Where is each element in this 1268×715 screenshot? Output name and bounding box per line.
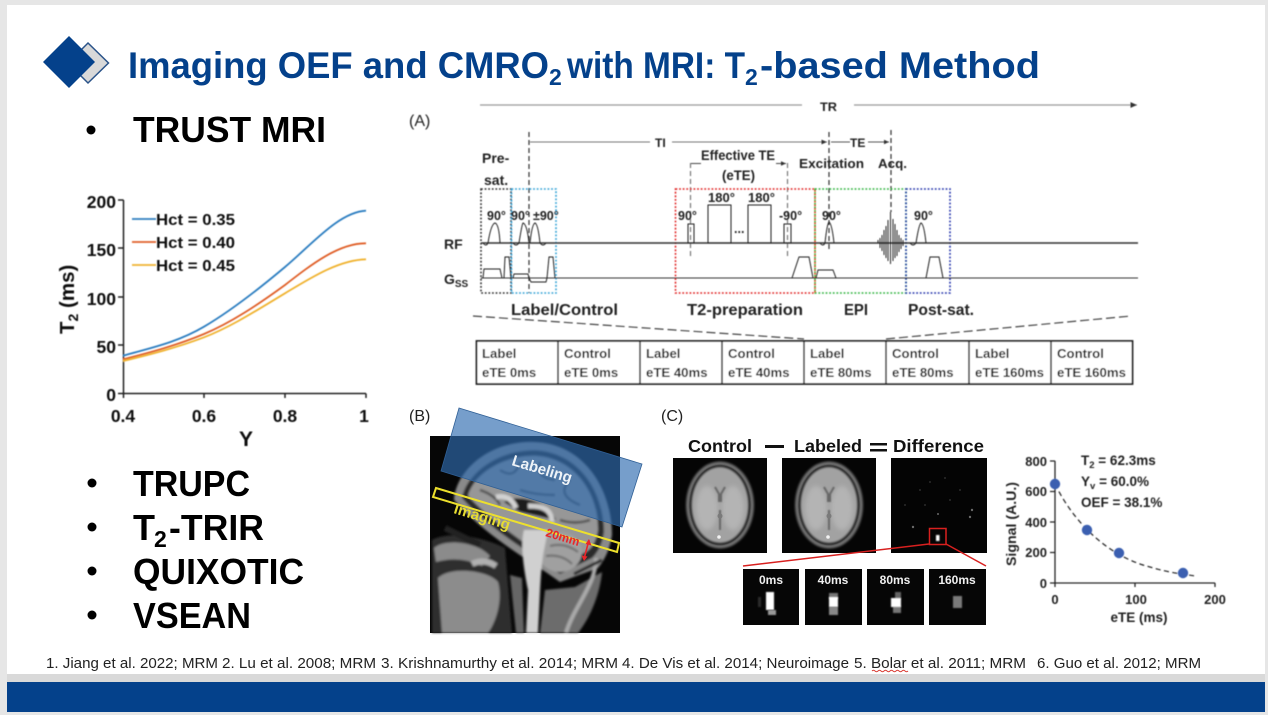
zoomed tile: 0ms: 0ms [759, 573, 783, 587]
zoom dashed lines [473, 316, 1131, 339]
acquisition label: Acq. [878, 156, 907, 171]
scatter x title: eTE (ms) [1110, 610, 1168, 625]
gradient pulses [483, 257, 943, 282]
section labels: EPI [844, 302, 868, 319]
acquisition table: eTE 0ms [482, 365, 536, 380]
pre-sat label: sat. [484, 172, 508, 188]
flip angle labels: 90° [487, 209, 506, 223]
curve: Hct 0.40 [123, 243, 366, 359]
title: 2 [745, 64, 758, 90]
acquisition table [476, 341, 1132, 384]
acquisition table: Control [564, 346, 611, 361]
bullet: TRUST MRI: TRUST MRI [133, 109, 326, 150]
x axis tick labels: 0.6 [192, 406, 216, 426]
flip angle labels: 180° [748, 190, 775, 205]
flip angle labels: ±90° [533, 209, 559, 223]
x axis tick labels: 1 [359, 406, 369, 426]
difference image [891, 458, 987, 553]
scatter y tick labels: 800 [1025, 454, 1047, 469]
flip angle labels: -90° [779, 209, 802, 223]
x axis tick labels [111, 406, 369, 426]
zoomed tile: 40ms: 40ms [818, 573, 849, 587]
scatter y tick labels: 600 [1025, 484, 1047, 499]
bullet list: other methods: -TRIR [169, 507, 264, 548]
curve: Hct 0.35 [123, 211, 366, 356]
line chart: T2 vs Y [56, 192, 369, 451]
acquisition table: Control [728, 346, 775, 361]
imaging text: Imaging [452, 501, 512, 534]
icon: title diamonds [43, 36, 108, 88]
references: 2. Lu et al. 2008; MRM [222, 656, 376, 672]
TE arrow [831, 136, 889, 150]
fit results: T [1081, 453, 1089, 468]
panel C: control, labeled and difference images [661, 408, 987, 625]
panel B: sagittal MRI with labeling and imaging slabs [409, 408, 642, 633]
zoomed tile: 80ms: 80ms [880, 573, 911, 587]
fit curve [1055, 484, 1195, 576]
acquisition table: eTE 0ms [564, 365, 618, 380]
y axis tick labels: 50 [97, 337, 116, 357]
labeling slab [441, 408, 642, 527]
y axis tick labels: 100 [87, 289, 116, 309]
control image [673, 458, 767, 553]
zoomed tile: 160ms [929, 569, 986, 625]
acquisition table: Label [482, 346, 516, 361]
references [46, 656, 1201, 672]
references: 1. Jiang et al. 2022; MRM [46, 656, 218, 672]
Gss label: G [444, 271, 455, 287]
fit results: 2 [1089, 460, 1095, 471]
scatter y tick labels: 0 [1040, 576, 1047, 591]
zoomed tile: 160ms: 160ms [938, 573, 976, 587]
scatter chart: signal vs eTE [1004, 453, 1226, 625]
bullet list: other methods: TRUPC [133, 463, 250, 504]
RF and Gss baselines [481, 243, 1138, 278]
acquisition table: eTE 80ms [892, 365, 954, 380]
pre-sat label [482, 150, 510, 188]
bullet list: other methods: VSEAN [133, 595, 251, 636]
red zoom callout [743, 528, 986, 566]
zoomed tile: 0ms [743, 569, 799, 625]
acquisition table: eTE 40ms [646, 365, 708, 380]
y axis title: T [56, 321, 79, 334]
chart legend: Hct = 0.45 [156, 258, 235, 275]
fit results: = 62.3ms [1095, 453, 1156, 468]
fit results: Y [1081, 474, 1090, 489]
zoomed tile: 80ms [867, 569, 924, 625]
footer band [7, 682, 1265, 712]
title: with MRI: T [566, 45, 745, 86]
chart legend [132, 212, 235, 275]
references: 3. Krishnamurthy et al. 2014; MRM [381, 656, 618, 672]
chart legend: Hct = 0.40 [156, 235, 235, 252]
timing dashed lines [529, 130, 891, 293]
image equation heading: Difference [893, 436, 984, 456]
x axis tick labels: 0.8 [273, 406, 297, 426]
flip angle labels: 90° [822, 209, 841, 223]
y axis tick labels: 0 [106, 385, 116, 405]
fit results: = 60.0% [1095, 474, 1149, 489]
acquisition table: Label [975, 346, 1009, 361]
flip angle labels: 180° [708, 190, 735, 205]
title: Imaging OEF and CMRO [128, 45, 549, 86]
TR arrow: TR [820, 100, 837, 114]
imaging slab [433, 488, 619, 552]
scatter y tick labels: 200 [1025, 545, 1047, 560]
acquisition table: eTE 160ms [975, 365, 1044, 380]
TI arrow: TI [655, 136, 666, 150]
fit results: OEF = 38.1% [1081, 495, 1162, 510]
scatter x tick labels [1051, 592, 1226, 607]
acquisition table: Control [892, 346, 939, 361]
bullet list: other methods: QUIXOTIC [133, 551, 304, 592]
acquisition table: eTE 40ms [728, 365, 790, 380]
data points [1050, 479, 1188, 578]
y axis title: (ms) [56, 265, 79, 314]
image equation heading [688, 436, 984, 456]
labeled image [782, 458, 876, 553]
bullet list: other methods: T [133, 507, 155, 548]
panel label B: (B) [409, 408, 430, 425]
acquisition table: eTE 160ms [1057, 365, 1126, 380]
y axis tick labels [87, 192, 116, 405]
flip angle labels: ... [734, 222, 744, 236]
TE arrow: TE [850, 136, 865, 150]
sequence section boxes [481, 189, 950, 293]
sagittal brain image [430, 436, 620, 633]
labeling text: Labeling [510, 453, 574, 487]
acquisition table: Control [1057, 346, 1104, 361]
x axis title: Y [239, 428, 253, 451]
section labels: T2-preparation [687, 302, 803, 319]
effective TE label [691, 148, 786, 183]
image equation heading: Control [688, 436, 752, 456]
Gss label: SS [455, 279, 469, 290]
excitation label: Excitation [799, 156, 864, 171]
EPI readout [878, 212, 903, 264]
section labels: Post-sat. [908, 302, 974, 319]
flip angle labels [487, 190, 933, 236]
flip angle labels: 90° [914, 209, 933, 223]
y axis tick labels: 200 [87, 192, 116, 212]
panel label A: (A) [409, 113, 430, 130]
RF label: RF [444, 236, 463, 252]
pre-sat label: Pre- [482, 150, 510, 166]
scatter y title: Signal (A.U.) [1004, 482, 1019, 566]
title [128, 45, 1040, 90]
title: -based Method [760, 45, 1040, 86]
effective TE label: Effective TE [701, 148, 775, 163]
bullet list: other methods [88, 463, 304, 636]
references: 4. De Vis et al. 2014; Neuroimage [622, 656, 849, 672]
x axis tick labels: 0.4 [111, 406, 135, 426]
acquisition table: Label [810, 346, 844, 361]
image equation heading: Labeled [794, 436, 862, 456]
panel label C: (C) [661, 408, 683, 425]
flip angle labels: 90° [678, 209, 697, 223]
flip angle labels: 90° [511, 209, 530, 223]
scatter y tick labels: 400 [1025, 515, 1047, 530]
scatter x tick labels: 100 [1125, 592, 1147, 607]
panel A: pulse sequence diagram [409, 100, 1138, 384]
RF pulses [483, 205, 926, 245]
title: 2 [549, 64, 562, 90]
references: 5. Bolar et al. 2011; MRM [854, 656, 1026, 672]
section labels: Label/Control [511, 302, 618, 319]
chart legend: Hct = 0.35 [156, 212, 235, 229]
y axis title: 2 [65, 313, 81, 321]
fit results [1081, 453, 1162, 510]
y axis tick labels: 150 [87, 240, 116, 260]
scatter x tick labels: 0 [1051, 592, 1059, 607]
20mm marker [544, 525, 592, 561]
acquisition table: Label [646, 346, 680, 361]
scatter y tick labels [1025, 454, 1047, 591]
20mm marker: 20mm [544, 525, 581, 549]
bullet list: other methods: 2 [154, 526, 167, 552]
effective TE label: (eTE) [722, 168, 755, 183]
curve: Hct 0.45 [123, 259, 366, 361]
references: 6. Guo et al. 2012; MRM [1037, 656, 1201, 672]
acquisition table: eTE 80ms [810, 365, 872, 380]
fit results: v [1090, 481, 1096, 492]
chart axes [118, 200, 366, 398]
scatter x tick labels: 200 [1204, 592, 1226, 607]
zoomed tile: 40ms [805, 569, 862, 625]
section labels [511, 302, 974, 319]
scatter axes [1050, 461, 1215, 587]
